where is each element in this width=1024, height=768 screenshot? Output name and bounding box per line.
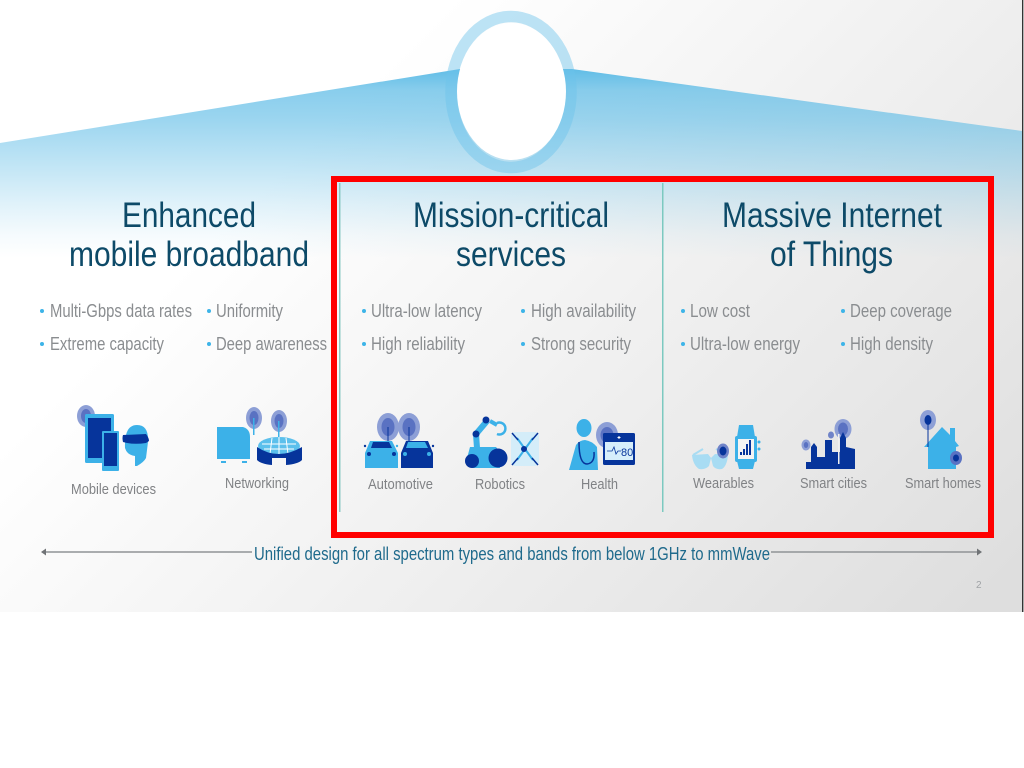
bullet list xyxy=(362,301,636,354)
panel: mission-critical services xyxy=(362,195,636,493)
bullet list: Extreme capacity xyxy=(50,334,164,354)
icon: robotics xyxy=(465,416,539,468)
roof shape xyxy=(0,69,1022,258)
label: robotics: Robotics xyxy=(475,476,525,493)
heading: enhanced mobile broadband: mobile broadband xyxy=(69,234,309,274)
bullet list xyxy=(681,301,952,354)
bullet list: High reliability xyxy=(371,334,465,354)
bullet list: High availability xyxy=(531,301,636,321)
red highlight frame xyxy=(334,179,991,535)
icon: smart homes xyxy=(920,410,962,469)
icon: health: 80 xyxy=(621,447,633,459)
bullet list: Ultra-low energy xyxy=(690,334,800,354)
slide background xyxy=(0,0,1024,612)
label: health: Health xyxy=(581,476,618,493)
heading: mission-critical services: services xyxy=(456,234,566,274)
divider: left xyxy=(339,183,340,512)
heading: massive internet of things xyxy=(722,195,942,274)
bullet list: Uniformity xyxy=(216,301,283,321)
label: automotive: Automotive xyxy=(368,476,433,493)
icon: health xyxy=(569,419,635,470)
icon: mobile devices xyxy=(77,405,149,471)
icon: wearables xyxy=(692,425,760,469)
label: networking: Networking xyxy=(225,475,289,492)
bullet list: Ultra-low latency xyxy=(371,301,482,321)
heading: massive internet of things: of Things xyxy=(770,234,893,274)
spectrum arrow with caption xyxy=(41,543,982,564)
icon: automotive xyxy=(364,413,434,468)
heading: mission-critical services: Mission-critical xyxy=(413,195,609,235)
bullet list: Deep awareness xyxy=(216,334,327,354)
label: mobile devices: Mobile devices xyxy=(71,481,156,498)
page number: 2 xyxy=(976,580,982,591)
circle emblem xyxy=(451,16,571,168)
panel: enhanced mobile broadband xyxy=(40,195,327,498)
icon: networking xyxy=(217,407,302,465)
bullet list: Low cost xyxy=(690,301,750,321)
bullet list xyxy=(40,301,327,354)
heading: massive internet of things: Massive Internet xyxy=(722,195,942,235)
divider: right xyxy=(662,183,664,512)
bullet list: Strong security xyxy=(531,334,631,354)
heading: enhanced mobile broadband xyxy=(69,195,309,274)
icon: smart cities xyxy=(802,419,855,469)
heading: enhanced mobile broadband: Enhanced xyxy=(122,195,256,235)
heading: mission-critical services xyxy=(413,195,609,274)
label: smart cities: Smart cities xyxy=(800,475,867,492)
bullet list: Multi-Gbps data rates xyxy=(50,301,192,321)
panel: massive internet of things xyxy=(681,195,981,492)
label: smart homes: Smart homes xyxy=(905,475,981,492)
label: wearables: Wearables xyxy=(693,475,754,492)
bullet list: Deep coverage xyxy=(850,301,952,321)
spectrum arrow with caption: Unified design for all spectrum types and bands from below 1GHz to mmWave xyxy=(254,543,770,564)
bullet list: High density xyxy=(850,334,933,354)
